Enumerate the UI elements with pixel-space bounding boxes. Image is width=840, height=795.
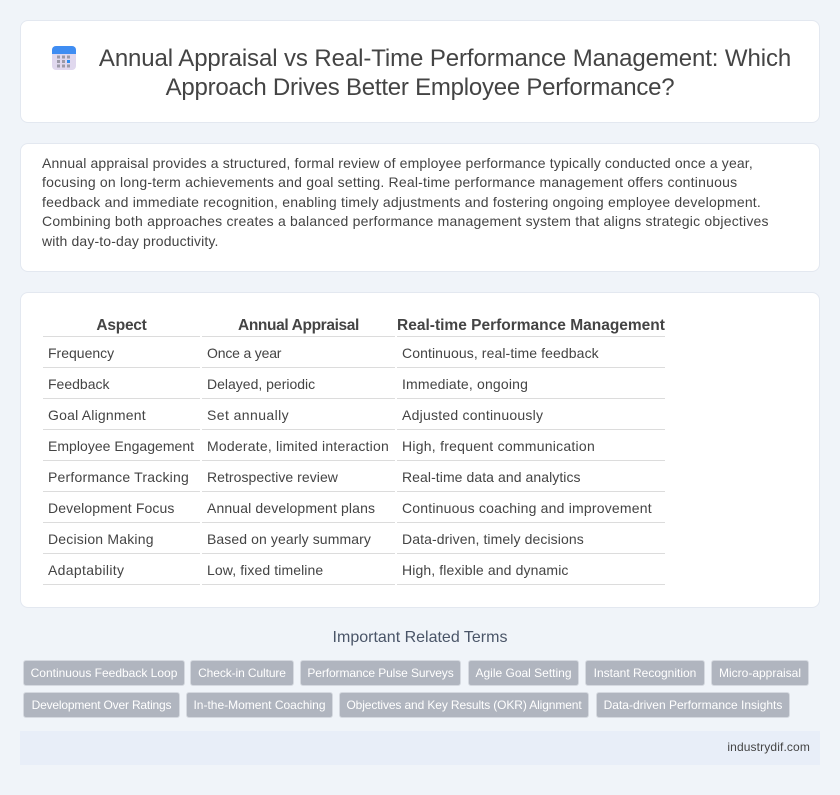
comparison table: Based on yearly summary bbox=[207, 531, 371, 547]
comparison table: Delayed, periodic bbox=[207, 376, 315, 392]
related terms tags: Check-in Culture bbox=[198, 666, 286, 680]
comparison table: Performance Tracking bbox=[48, 469, 189, 485]
intro text: Annual appraisal provides a structured, formal review of employee performance typically conducted once a year, bbox=[42, 155, 753, 171]
title: Annual Appraisal vs Real-Time Performance Management: Which bbox=[99, 45, 791, 72]
comparison table: Real-time data and analytics bbox=[402, 469, 581, 485]
footer source text: industrydif.com bbox=[727, 740, 810, 754]
comparison table: Adjusted continuously bbox=[402, 407, 543, 423]
comparison table: Employee Engagement bbox=[48, 438, 194, 454]
column header: Aspect: Aspect bbox=[96, 317, 147, 334]
comparison table: Set annually bbox=[207, 407, 289, 423]
comparison table: Immediate, ongoing bbox=[402, 376, 528, 392]
related terms tags: In-the-Moment Coaching bbox=[193, 698, 326, 712]
footer bbox=[20, 731, 820, 765]
title bbox=[99, 45, 791, 101]
intro text bbox=[42, 155, 769, 249]
comparison table: Low, fixed timeline bbox=[207, 562, 323, 578]
comparison table: Decision Making bbox=[48, 531, 154, 547]
related terms tags: Data-driven Performance Insights bbox=[604, 698, 782, 712]
title: Approach Drives Better Employee Performance? bbox=[166, 74, 674, 101]
intro text: Combining both approaches creates a balanced performance management system that aligns strategic objectives bbox=[42, 213, 769, 229]
comparison table: Annual development plans bbox=[207, 500, 375, 516]
comparison table: Feedback bbox=[48, 376, 109, 392]
comparison table: Continuous, real-time feedback bbox=[402, 345, 599, 361]
related terms tags: Micro-appraisal bbox=[719, 666, 801, 680]
column header: Annual Appraisal: Annual Appraisal bbox=[238, 317, 359, 334]
comparison table: Goal Alignment bbox=[48, 407, 146, 423]
icon: calendar bbox=[52, 46, 76, 70]
comparison table: Adaptability bbox=[48, 562, 124, 578]
comparison table panel bbox=[20, 292, 820, 608]
intro text: feedback and immediate recognition, enabling timely adjustments and fostering ongoing employee development. bbox=[42, 194, 761, 210]
column header: Real-time Performance Management: Real-time Performance Management bbox=[397, 317, 665, 334]
related terms tags bbox=[23, 660, 809, 718]
comparison table: Frequency bbox=[48, 345, 114, 361]
comparison table: High, frequent communication bbox=[402, 438, 595, 454]
comparison table: Retrospective review bbox=[207, 469, 338, 485]
related terms heading: Important Related Terms bbox=[333, 629, 507, 646]
comparison table: High, flexible and dynamic bbox=[402, 562, 569, 578]
intro panel bbox=[20, 143, 820, 272]
related terms tags: Performance Pulse Surveys bbox=[307, 666, 454, 680]
intro text: focusing on long-term achievements and goal setting. Real-time performance management offers continuous bbox=[42, 174, 737, 190]
header panel bbox=[20, 20, 820, 123]
comparison table: Once a year bbox=[207, 345, 281, 361]
comparison table bbox=[43, 317, 665, 585]
related terms tags: Continuous Feedback Loop bbox=[31, 666, 177, 680]
related terms tags: Agile Goal Setting bbox=[475, 666, 572, 680]
intro text: with day-to-day productivity. bbox=[42, 233, 219, 249]
comparison table: Data-driven, timely decisions bbox=[402, 531, 584, 547]
comparison table: Continuous coaching and improvement bbox=[402, 500, 652, 516]
related terms tags: Instant Recognition bbox=[594, 666, 696, 680]
comparison table: Moderate, limited interaction bbox=[207, 438, 389, 454]
related terms tags: Objectives and Key Results (OKR) Alignment bbox=[346, 698, 582, 712]
related terms tags: Development Over Ratings bbox=[32, 698, 171, 712]
comparison table: Development Focus bbox=[48, 500, 175, 516]
